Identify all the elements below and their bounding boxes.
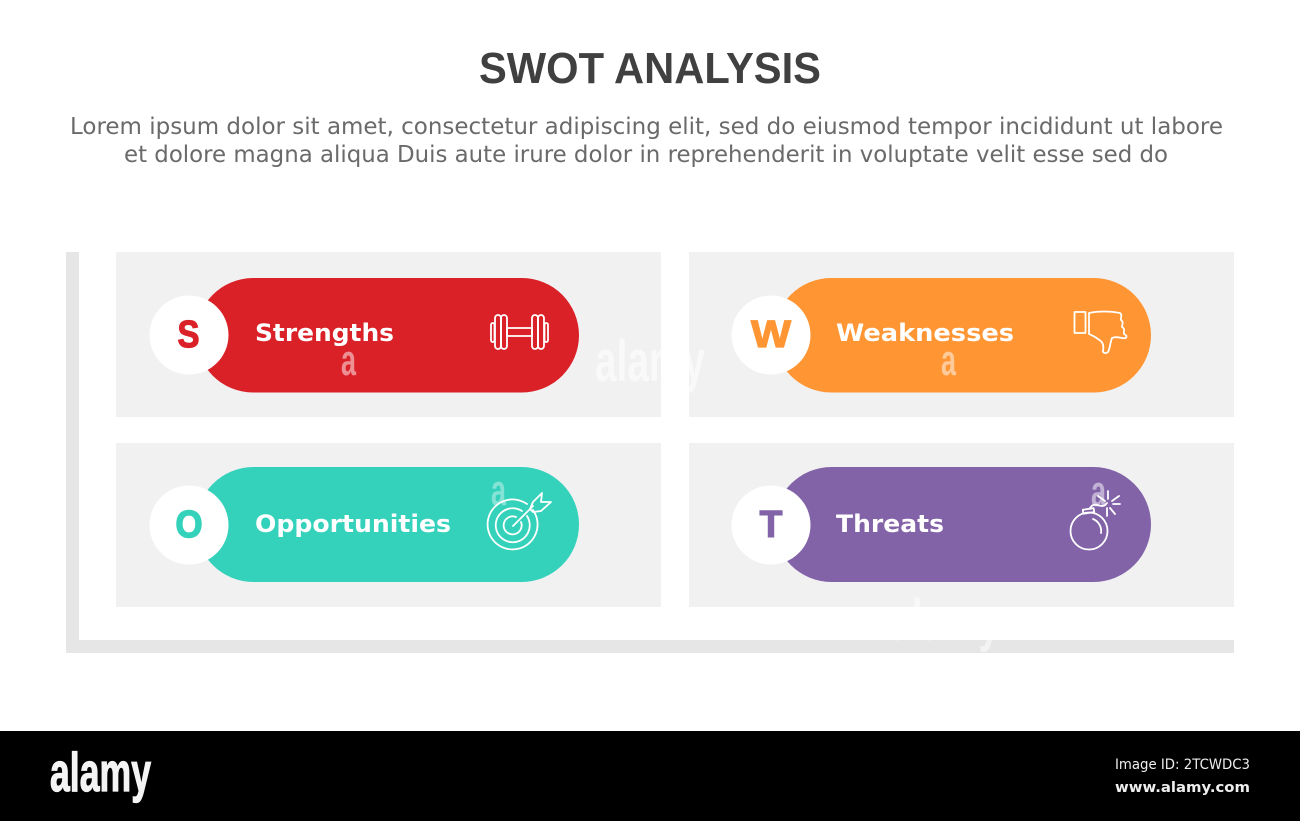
letter badge: W xyxy=(751,314,791,356)
icon: dumbbell xyxy=(491,315,548,349)
description text: Lorem ipsum dolor sit amet, consectetur adipiscing elit, sed do eiusmod tempor incididunt ut labore xyxy=(70,112,1223,140)
description text: et dolore magna aliqua Duis aute irure dolor in reprehenderit in voluptate velit esse sed do xyxy=(124,140,1168,168)
panel: opportunities xyxy=(116,443,661,607)
icon: bomb xyxy=(1070,491,1120,550)
panel background xyxy=(689,443,1234,607)
panel: threats xyxy=(689,443,1234,607)
letter badge xyxy=(732,486,810,564)
axis frame xyxy=(66,252,1234,653)
pill xyxy=(774,467,1151,582)
letter badge: T xyxy=(760,504,782,546)
label: Opportunities xyxy=(255,510,451,538)
footer logo: alamy xyxy=(50,741,151,803)
pill xyxy=(774,278,1151,392)
panel background xyxy=(689,252,1234,417)
watermark traces: alamy xyxy=(890,588,1000,653)
letter badge xyxy=(150,296,228,374)
footer bar xyxy=(0,731,1300,821)
label: Strengths xyxy=(255,319,394,347)
watermark traces: alamy xyxy=(595,329,705,394)
watermark traces xyxy=(341,329,1106,653)
title: SWOT ANALYSIS xyxy=(479,44,821,93)
watermark traces: a xyxy=(341,336,356,385)
image id: Image ID: 2TCWDC3 xyxy=(1115,757,1250,773)
icon: thumbs down xyxy=(1074,312,1126,353)
panel: strengths xyxy=(116,252,661,417)
label: Weaknesses xyxy=(836,319,1014,347)
description text xyxy=(70,112,1223,168)
website: www.alamy.com xyxy=(1115,780,1250,796)
pill xyxy=(196,278,579,392)
pill xyxy=(196,467,579,582)
letter badge xyxy=(150,486,228,564)
panel background xyxy=(116,252,661,417)
icon: target with arrow xyxy=(488,493,551,549)
panel: weaknesses xyxy=(689,252,1234,417)
panel background xyxy=(116,443,661,607)
watermark traces: a xyxy=(491,466,506,515)
letter badge xyxy=(732,296,810,374)
watermark traces: a xyxy=(941,336,956,385)
label: Threats xyxy=(836,510,944,538)
letter badge: O xyxy=(176,504,202,546)
letter badge: S xyxy=(178,314,200,356)
watermark traces: a xyxy=(1091,467,1106,516)
